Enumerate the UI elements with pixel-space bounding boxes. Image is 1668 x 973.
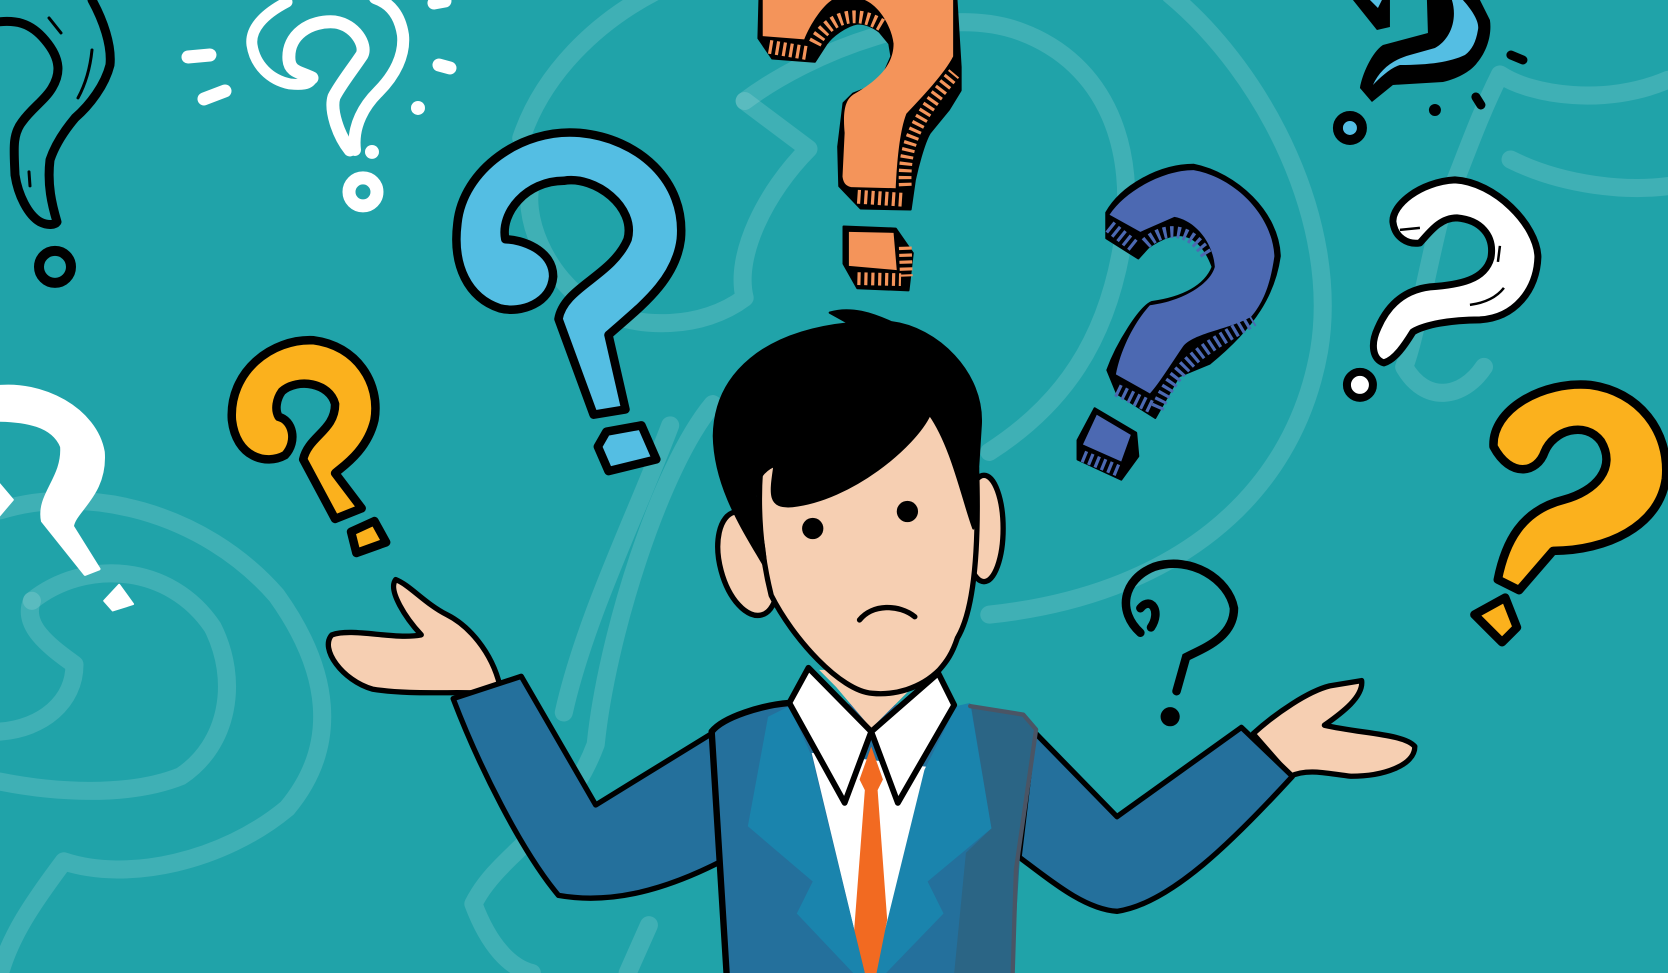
right hand xyxy=(1253,681,1415,776)
dot xyxy=(351,521,386,553)
face xyxy=(759,393,977,694)
dot xyxy=(39,251,71,283)
neck xyxy=(819,670,931,728)
question mark: top white with rays xyxy=(188,0,450,206)
jacket right edge xyxy=(970,706,1036,973)
left eye xyxy=(802,518,823,539)
accents xyxy=(1400,228,1504,305)
right sleeve xyxy=(1019,727,1292,911)
small dot xyxy=(365,145,379,159)
purple dot xyxy=(1078,408,1138,480)
accents xyxy=(29,18,92,186)
purple hatching xyxy=(1110,227,1253,408)
left ear xyxy=(707,505,788,622)
question mark: orange xyxy=(758,0,961,290)
right collar xyxy=(871,673,954,803)
sparks xyxy=(1476,55,1523,105)
dot xyxy=(1338,116,1362,140)
left sleeve xyxy=(453,676,723,898)
question mark: yellow right xyxy=(1474,385,1666,642)
dot xyxy=(1347,372,1373,398)
jacket right shadow xyxy=(954,706,1036,973)
hair xyxy=(714,310,981,569)
left lapel xyxy=(748,706,865,973)
tie xyxy=(854,746,887,973)
dot xyxy=(598,425,656,471)
right lapel xyxy=(874,703,991,973)
jacket outline xyxy=(712,703,789,973)
man xyxy=(328,310,1415,973)
question mark: white right xyxy=(1347,180,1538,398)
question mark: top-right blue xyxy=(1338,0,1523,140)
ring dot xyxy=(349,178,377,206)
question mark: yellow left xyxy=(232,340,386,553)
right ear xyxy=(965,475,1003,582)
dot xyxy=(104,585,133,610)
question mark: white left xyxy=(0,386,133,610)
jacket xyxy=(712,703,1036,973)
dot xyxy=(1474,598,1517,642)
question mark: top-left black outline xyxy=(0,0,110,283)
question mark: sky blue xyxy=(456,132,681,471)
shirt xyxy=(812,753,927,973)
orange hatching xyxy=(769,17,954,200)
left hand xyxy=(328,580,500,693)
dot xyxy=(1161,707,1180,726)
mouth xyxy=(860,608,915,620)
left collar xyxy=(789,668,871,803)
question mark: purple xyxy=(1078,165,1280,480)
question mark: small black xyxy=(1126,564,1234,726)
right eye xyxy=(897,501,918,522)
orange dot xyxy=(844,227,913,290)
rays xyxy=(188,1,450,99)
